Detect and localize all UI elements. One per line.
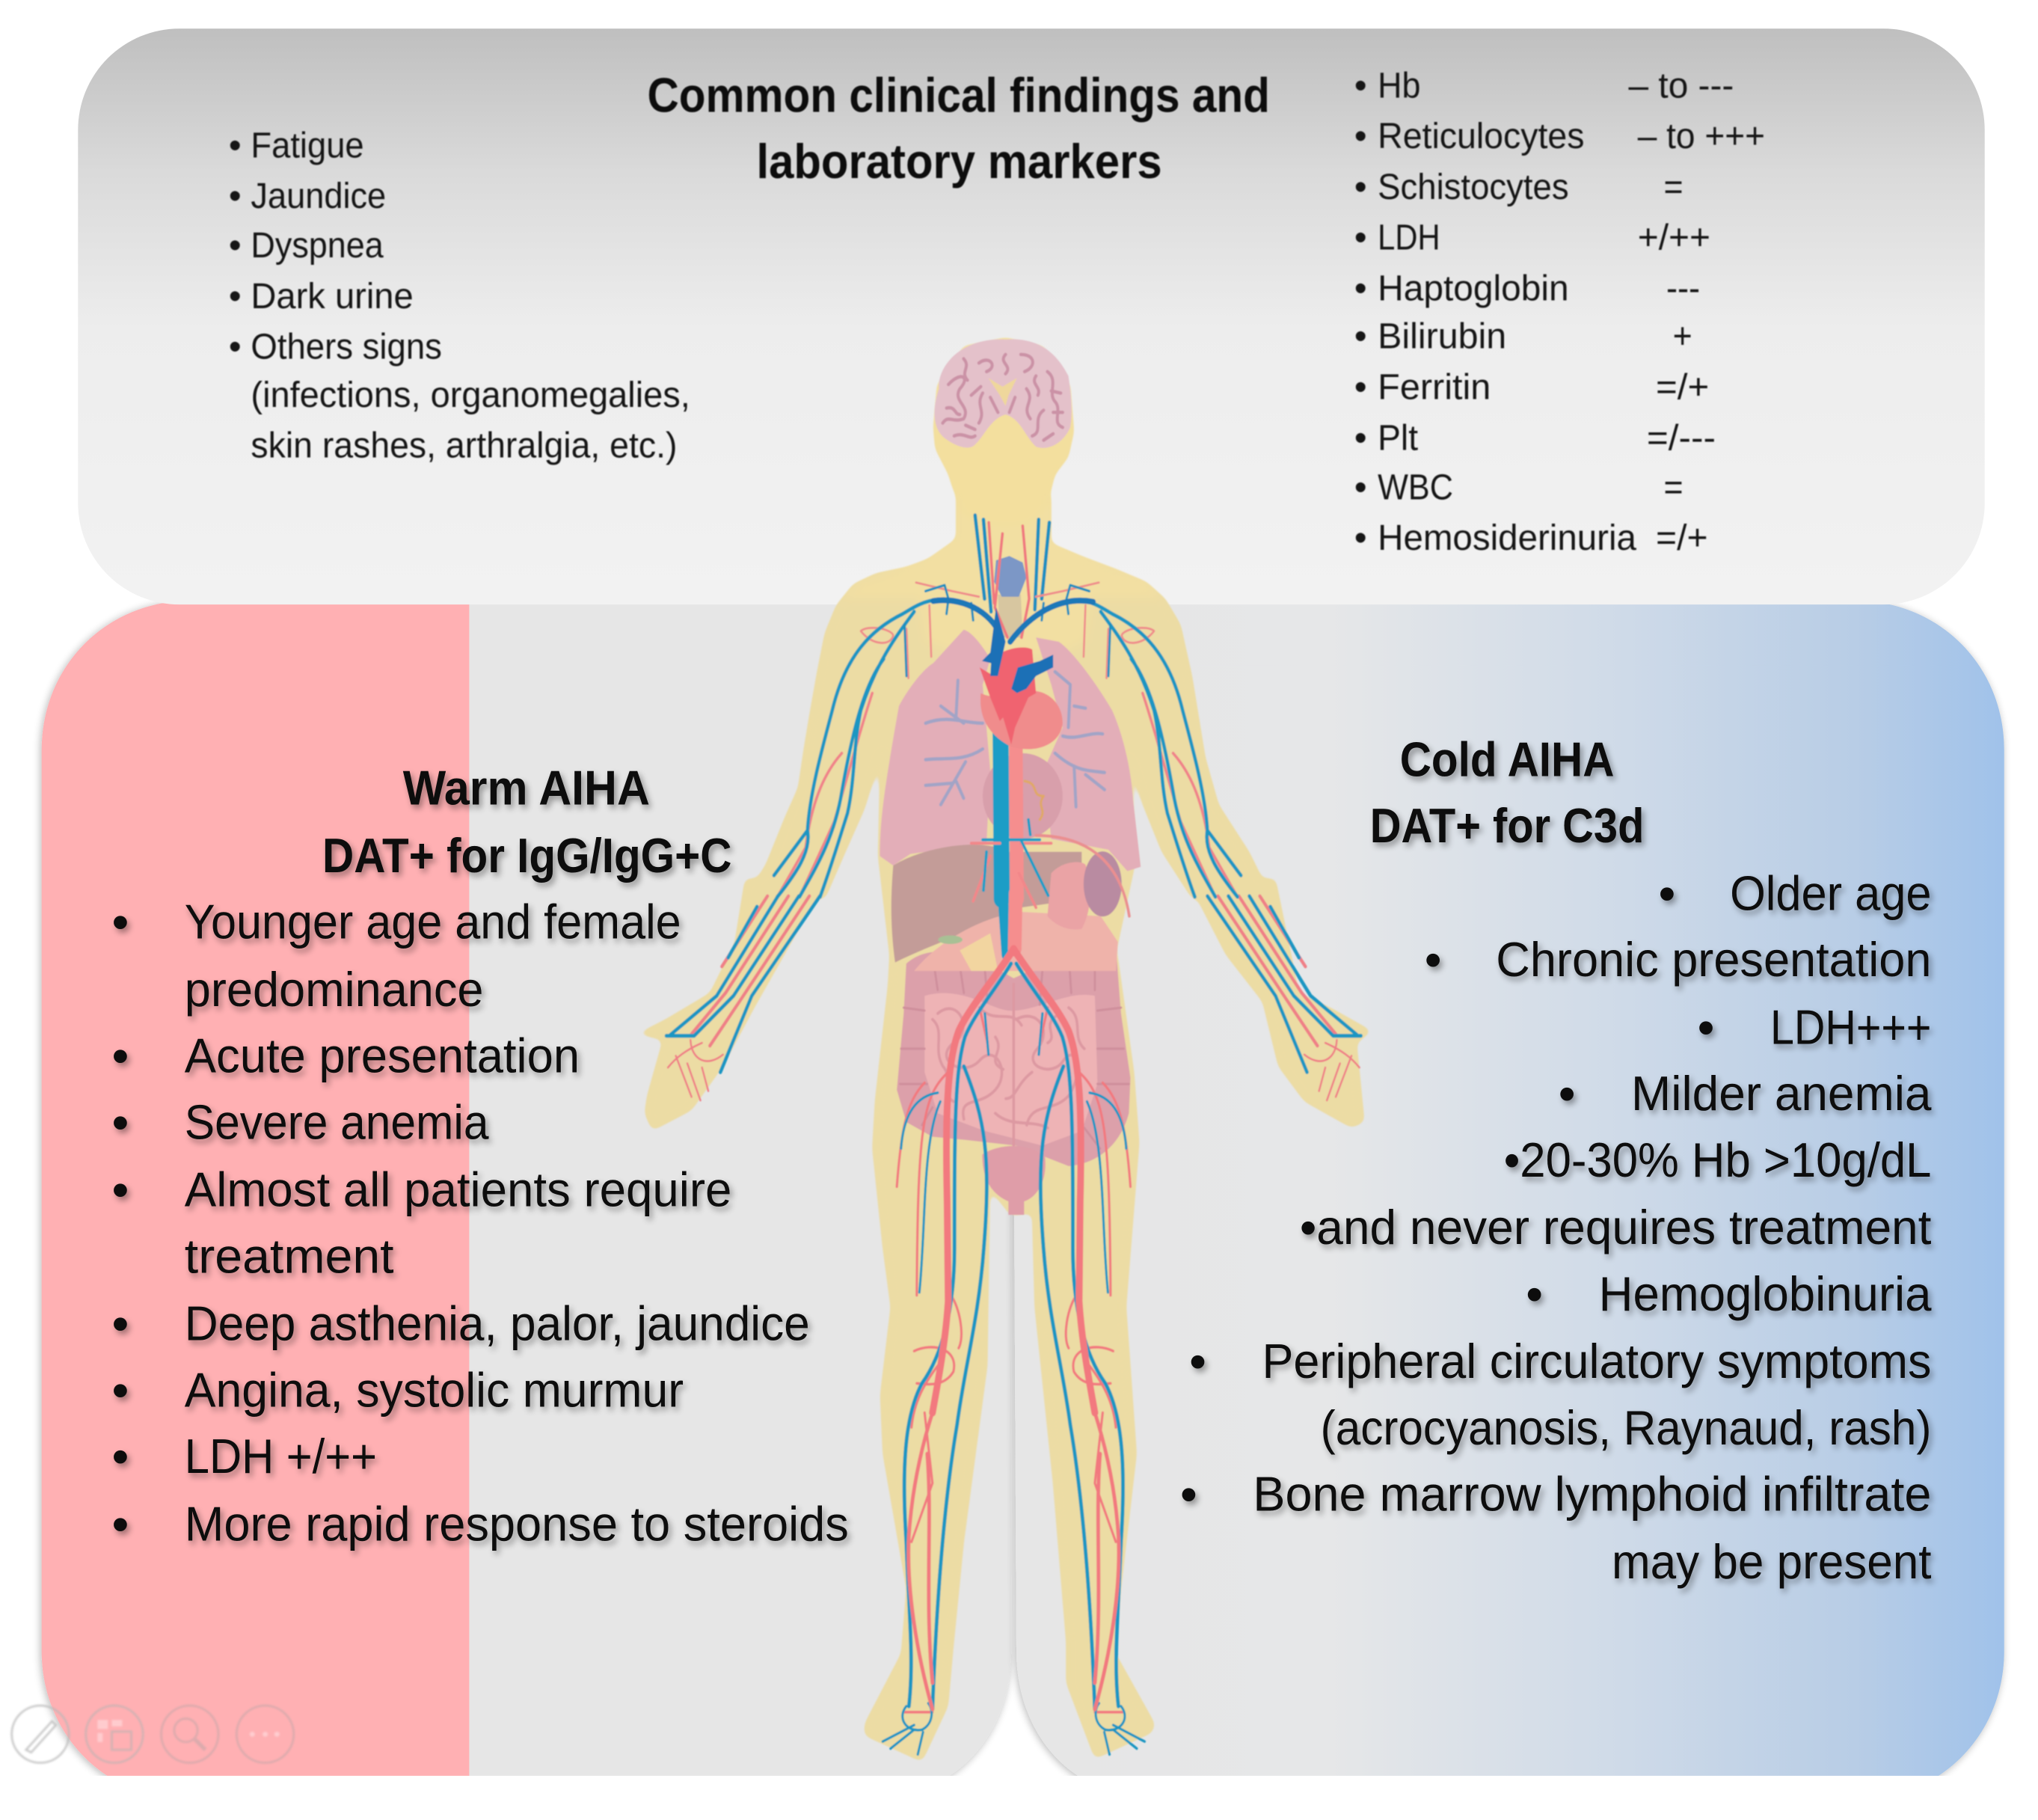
list: clinical symptoms: • — [229, 126, 242, 165]
list: warm AIHA features: • — [111, 895, 129, 949]
heading: warm AIHA: DAT+ for IgG/IgG+C — [322, 828, 731, 883]
icon: tiles — [86, 1706, 143, 1763]
table: laboratory markers: =/+ — [1656, 518, 1708, 558]
text block: cold AIHA — [1180, 732, 1932, 1589]
table: laboratory markers: Hb — [1378, 66, 1420, 105]
list: clinical symptoms: Fatigue — [251, 126, 364, 165]
body silhouette — [636, 337, 1372, 1762]
list: cold AIHA features: • — [1698, 999, 1714, 1054]
table: laboratory markers: = — [1663, 168, 1684, 207]
heading: warm AIHA: Warm AIHA — [403, 761, 650, 815]
list: warm AIHA features: Acute presentation — [185, 1029, 580, 1083]
list: warm AIHA features: predominance — [185, 962, 484, 1017]
table: laboratory markers: – to +++ — [1638, 117, 1765, 156]
list: warm AIHA features: treatment — [185, 1228, 394, 1283]
list: warm AIHA features: • — [111, 1429, 129, 1483]
table: laboratory markers: • — [1354, 518, 1367, 558]
table: laboratory markers: • — [1354, 66, 1367, 105]
table: laboratory markers: + — [1673, 317, 1692, 357]
list: warm AIHA features: • — [111, 1094, 129, 1149]
intestines — [897, 943, 1131, 1215]
list: warm AIHA features: Deep asthenia, palor, jaundice — [185, 1296, 810, 1351]
list: clinical symptoms: (infections, organomegalies, — [251, 376, 690, 415]
list: cold AIHA features: • — [1425, 932, 1442, 987]
table: laboratory markers — [1354, 66, 1765, 558]
table: laboratory markers: Haptoglobin — [1378, 269, 1569, 308]
abdominal organs — [891, 836, 1129, 971]
table: laboratory markers: • — [1354, 168, 1367, 207]
thorax and abdomen — [774, 515, 1241, 971]
list: cold AIHA features: LDH+++ — [1770, 999, 1931, 1054]
page bottom crop — [0, 1776, 2038, 1820]
table: laboratory markers: Reticulocytes — [1378, 117, 1584, 156]
human anatomy illustration — [636, 337, 1372, 1762]
trunk vessels — [972, 732, 1052, 907]
list: cold AIHA features: • — [1180, 1466, 1197, 1521]
list: warm AIHA features: More rapid response to steroids — [185, 1496, 849, 1551]
table: laboratory markers: • — [1354, 468, 1367, 507]
list: warm AIHA features: • — [111, 1162, 129, 1217]
list: cold AIHA features: • — [1526, 1266, 1543, 1321]
table: laboratory markers: +/++ — [1638, 218, 1710, 258]
list: cold AIHA features: Bone marrow lymphoid infiltrate — [1253, 1466, 1931, 1521]
panel: warm AIHA background — [42, 601, 1011, 1801]
list: cold AIHA features: •and never requires treatment — [1300, 1200, 1931, 1254]
icon: more — [236, 1706, 294, 1763]
heading: warm AIHA — [322, 761, 731, 883]
table: laboratory markers: • — [1354, 317, 1367, 357]
heading: common clinical findings: laboratory markers — [756, 134, 1162, 189]
list: cold AIHA features: Milder anemia — [1631, 1066, 1932, 1121]
warm red band — [42, 601, 469, 1801]
table: laboratory markers: • — [1354, 368, 1367, 408]
table: laboratory markers: LDH — [1378, 218, 1440, 258]
table: laboratory markers: Schistocytes — [1378, 168, 1569, 207]
panel: cold AIHA background — [1011, 601, 2004, 1801]
list: warm AIHA features: Severe anemia — [185, 1094, 489, 1149]
table: laboratory markers: =/--- — [1647, 418, 1716, 458]
panel: clinical findings background — [78, 28, 1985, 604]
list: warm AIHA features — [111, 895, 849, 1551]
list: clinical symptoms: skin rashes, arthralgia, etc.) — [251, 426, 677, 466]
subclavian veins — [933, 600, 1093, 642]
list: clinical symptoms: Dark urine — [251, 277, 414, 316]
table: laboratory markers: WBC — [1378, 468, 1453, 507]
icon: pen — [12, 1706, 69, 1763]
list: cold AIHA features: (acrocyanosis, Raynaud, rash) — [1321, 1400, 1931, 1455]
list: warm AIHA features: • — [111, 1029, 129, 1083]
list: cold AIHA features: may be present — [1612, 1534, 1931, 1589]
forearm vessels — [666, 896, 1361, 1100]
list: clinical symptoms: • — [229, 277, 242, 316]
list: cold AIHA features: • — [1559, 1066, 1576, 1121]
heading: cold AIHA: Cold AIHA — [1400, 732, 1614, 787]
list: clinical symptoms: Others signs — [251, 328, 442, 367]
neck vessels — [975, 515, 1049, 637]
list: warm AIHA features: Almost all patients require — [185, 1162, 731, 1217]
list: cold AIHA features: Older age — [1730, 866, 1931, 921]
table: laboratory markers: Bilirubin — [1378, 317, 1506, 357]
list: clinical symptoms: Jaundice — [251, 177, 386, 216]
brain — [935, 340, 1072, 448]
thyroid and trachea — [994, 556, 1027, 637]
list: clinical symptoms: • — [229, 226, 242, 266]
list: warm AIHA features: Younger age and female — [185, 895, 681, 949]
list: cold AIHA features: Peripheral circulatory symptoms — [1262, 1334, 1931, 1388]
table: laboratory markers: Plt — [1378, 418, 1418, 458]
lungs — [880, 630, 1141, 871]
list: warm AIHA features: • — [111, 1362, 129, 1417]
list: cold AIHA features — [1180, 866, 1932, 1589]
table: laboratory markers: Hemosiderinuria — [1378, 518, 1636, 558]
list: cold AIHA features: Hemoglobinuria — [1599, 1266, 1932, 1321]
list: clinical symptoms — [229, 126, 690, 466]
list: clinical symptoms: • — [229, 177, 242, 216]
table: laboratory markers: • — [1354, 418, 1367, 458]
list: warm AIHA features: Angina, systolic murmur — [185, 1362, 684, 1417]
viewer toolbar icons — [12, 1706, 294, 1763]
text block: warm AIHA — [111, 761, 849, 1551]
heading: common clinical findings — [647, 67, 1270, 189]
leg and central vessels — [883, 893, 1144, 1754]
table: laboratory markers: --- — [1666, 269, 1700, 308]
table: laboratory markers: – to --- — [1629, 66, 1734, 105]
heading: common clinical findings: Common clinical findings and — [647, 67, 1270, 122]
table: laboratory markers: =/+ — [1656, 368, 1709, 408]
heading: cold AIHA — [1370, 732, 1644, 853]
list: clinical symptoms: • — [229, 328, 242, 367]
table: laboratory markers: Ferritin — [1378, 368, 1491, 408]
list: clinical symptoms: Dyspnea — [251, 226, 384, 266]
icon: search — [162, 1706, 218, 1763]
list: cold AIHA features: •20-30% Hb >10g/dL — [1504, 1133, 1931, 1187]
list: cold AIHA features: • — [1189, 1334, 1206, 1388]
list: warm AIHA features: • — [111, 1296, 129, 1351]
list: cold AIHA features: • — [1659, 866, 1675, 921]
list: warm AIHA features: LDH +/++ — [185, 1429, 377, 1483]
table: laboratory markers: • — [1354, 117, 1367, 156]
heart — [980, 607, 1063, 750]
table: laboratory markers: = — [1663, 468, 1684, 507]
heading: cold AIHA: DAT+ for C3d — [1370, 798, 1644, 853]
list: warm AIHA features: • — [111, 1496, 129, 1551]
list: cold AIHA features: Chronic presentation — [1496, 932, 1931, 987]
table: laboratory markers: • — [1354, 218, 1367, 258]
table: laboratory markers: • — [1354, 269, 1367, 308]
